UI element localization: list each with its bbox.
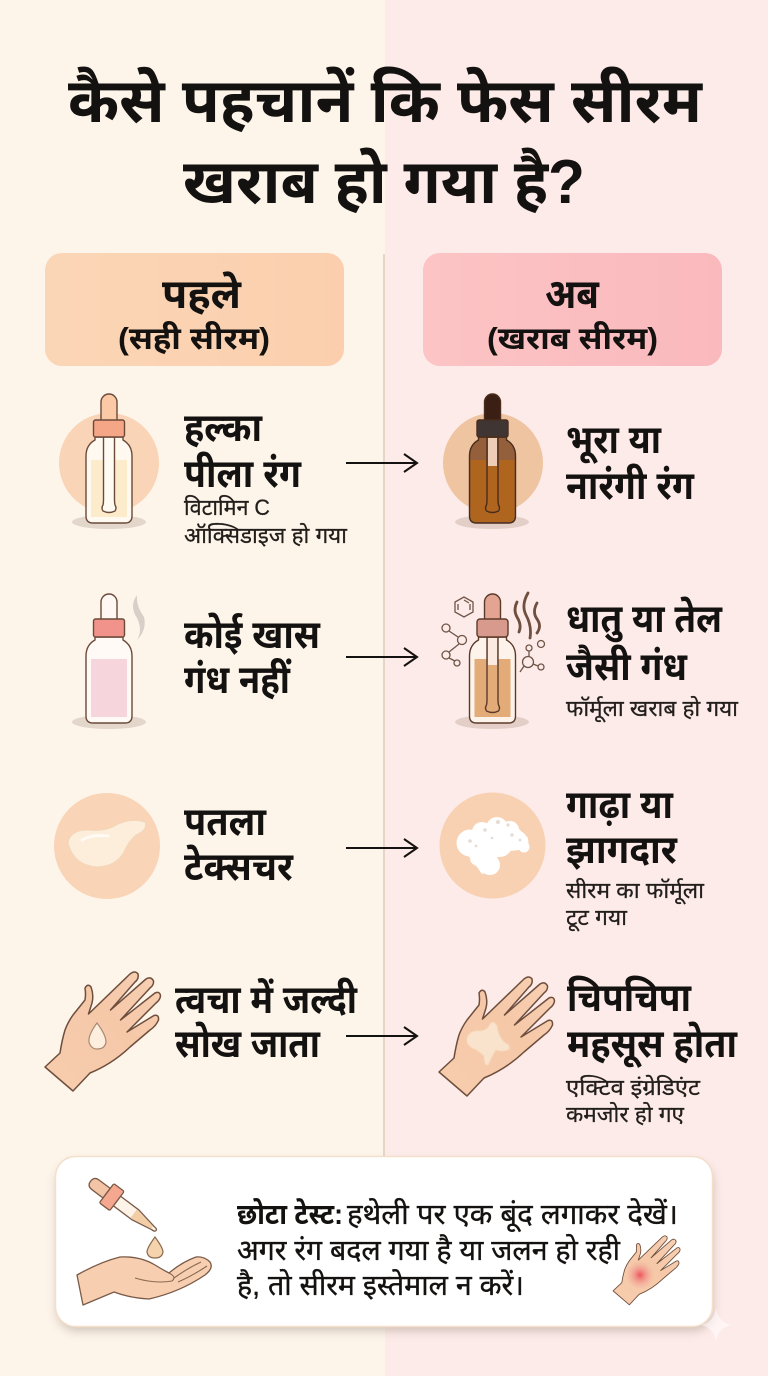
text: no particular smell — [184, 613, 321, 702]
text: brown or orange colour: नारंगी रंग — [566, 464, 695, 508]
icon: brown serum bottle — [443, 394, 543, 529]
text: quick test instructions: अगर रंग बदल गया है या जलन हो रही — [237, 1234, 621, 1267]
text: thick or foamy: गाढ़ा या — [566, 784, 674, 827]
text: thick or foamy — [566, 784, 704, 932]
text: feels sticky: चिपचिपा — [567, 976, 692, 1020]
text: brown or orange colour — [566, 419, 695, 508]
title: कैसे पहचानें कि फेस सीरम — [68, 65, 704, 136]
text: absorbs quickly into skin: त्वचा में जल्दी — [175, 978, 358, 1022]
text: light yellow colour: हल्का — [184, 407, 263, 450]
icon: foamy serum on circle — [440, 792, 546, 898]
text: quick test instructions — [237, 1197, 678, 1302]
header: before — [45, 253, 344, 366]
text: feels sticky — [566, 976, 738, 1127]
decorative sparkle — [701, 1308, 731, 1342]
icon: pink serum bottle with faint smell — [72, 594, 146, 729]
text: light yellow colour: पीला रंग — [184, 452, 302, 496]
text: feels sticky: एक्टिव इंग्रेडिएंट — [566, 1074, 701, 1100]
text: thin texture: टेक्सचर — [184, 845, 294, 889]
text: quick test instructions: है, तो सीरम इस्तेमाल न करें। — [237, 1269, 524, 1302]
text: feels sticky: महसूस होता — [567, 1022, 738, 1068]
icon: degraded bottle with molecules and smell — [442, 593, 544, 729]
text: quick test instructions: छोटा टेस्ट: — [237, 1197, 343, 1231]
icon: dropper with drop over open hand — [77, 1172, 211, 1305]
text: absorbs quickly into skin: सोख जाता — [175, 1022, 321, 1066]
text: no particular smell: कोई खास — [184, 613, 321, 657]
text: feels sticky: कमजोर हो गए — [566, 1102, 685, 1127]
text: thick or foamy: टूट गया — [566, 905, 627, 932]
header: now — [423, 253, 722, 366]
header: now: अब — [545, 271, 600, 317]
arrow 4 — [346, 1027, 417, 1045]
text: metal or oily smell: फॉर्मूला खराब हो गया — [566, 696, 738, 723]
background: left panel — [0, 0, 385, 1376]
icon: light yellow serum bottle — [59, 394, 159, 529]
text: light yellow colour: विटामिन C — [184, 495, 270, 520]
text: metal or oily smell: जैसी गंध — [566, 645, 688, 689]
text: thick or foamy: सीरम का फॉर्मूला — [566, 878, 704, 905]
icon: thin serum drop on circle — [54, 793, 160, 899]
text: light yellow colour — [184, 407, 347, 548]
arrow 2 — [346, 648, 417, 666]
icon: irritated hand — [613, 1236, 680, 1305]
text: thin texture — [184, 801, 294, 889]
text: metal or oily smell — [566, 597, 738, 723]
text: light yellow colour: ऑक्सिडाइज हो गया — [184, 523, 347, 548]
text: metal or oily smell: धातु या तेल — [566, 597, 723, 643]
text: brown or orange colour: भूरा या — [566, 419, 662, 464]
header: now: (खराब सीरम) — [487, 321, 658, 356]
icon: hand with sticky residue — [439, 977, 554, 1096]
background: right panel — [385, 0, 768, 1376]
title — [68, 65, 704, 217]
header: before: (सही सीरम) — [118, 321, 270, 356]
text: absorbs quickly into skin — [175, 978, 358, 1066]
text: thin texture: पतला — [184, 801, 267, 844]
header: before: पहले — [162, 270, 242, 317]
text: thick or foamy: झागदार — [566, 829, 678, 872]
panel: quick test card — [56, 1156, 713, 1331]
icon: hand with drop — [45, 972, 160, 1091]
arrow 3 — [346, 839, 417, 857]
text: quick test instructions: हथेली पर एक बूंद लगाकर देखें। — [347, 1198, 678, 1232]
text: no particular smell: गंध नहीं — [184, 658, 292, 702]
title: खराब हो गया है? — [183, 146, 585, 217]
arrow 1 — [346, 454, 417, 472]
